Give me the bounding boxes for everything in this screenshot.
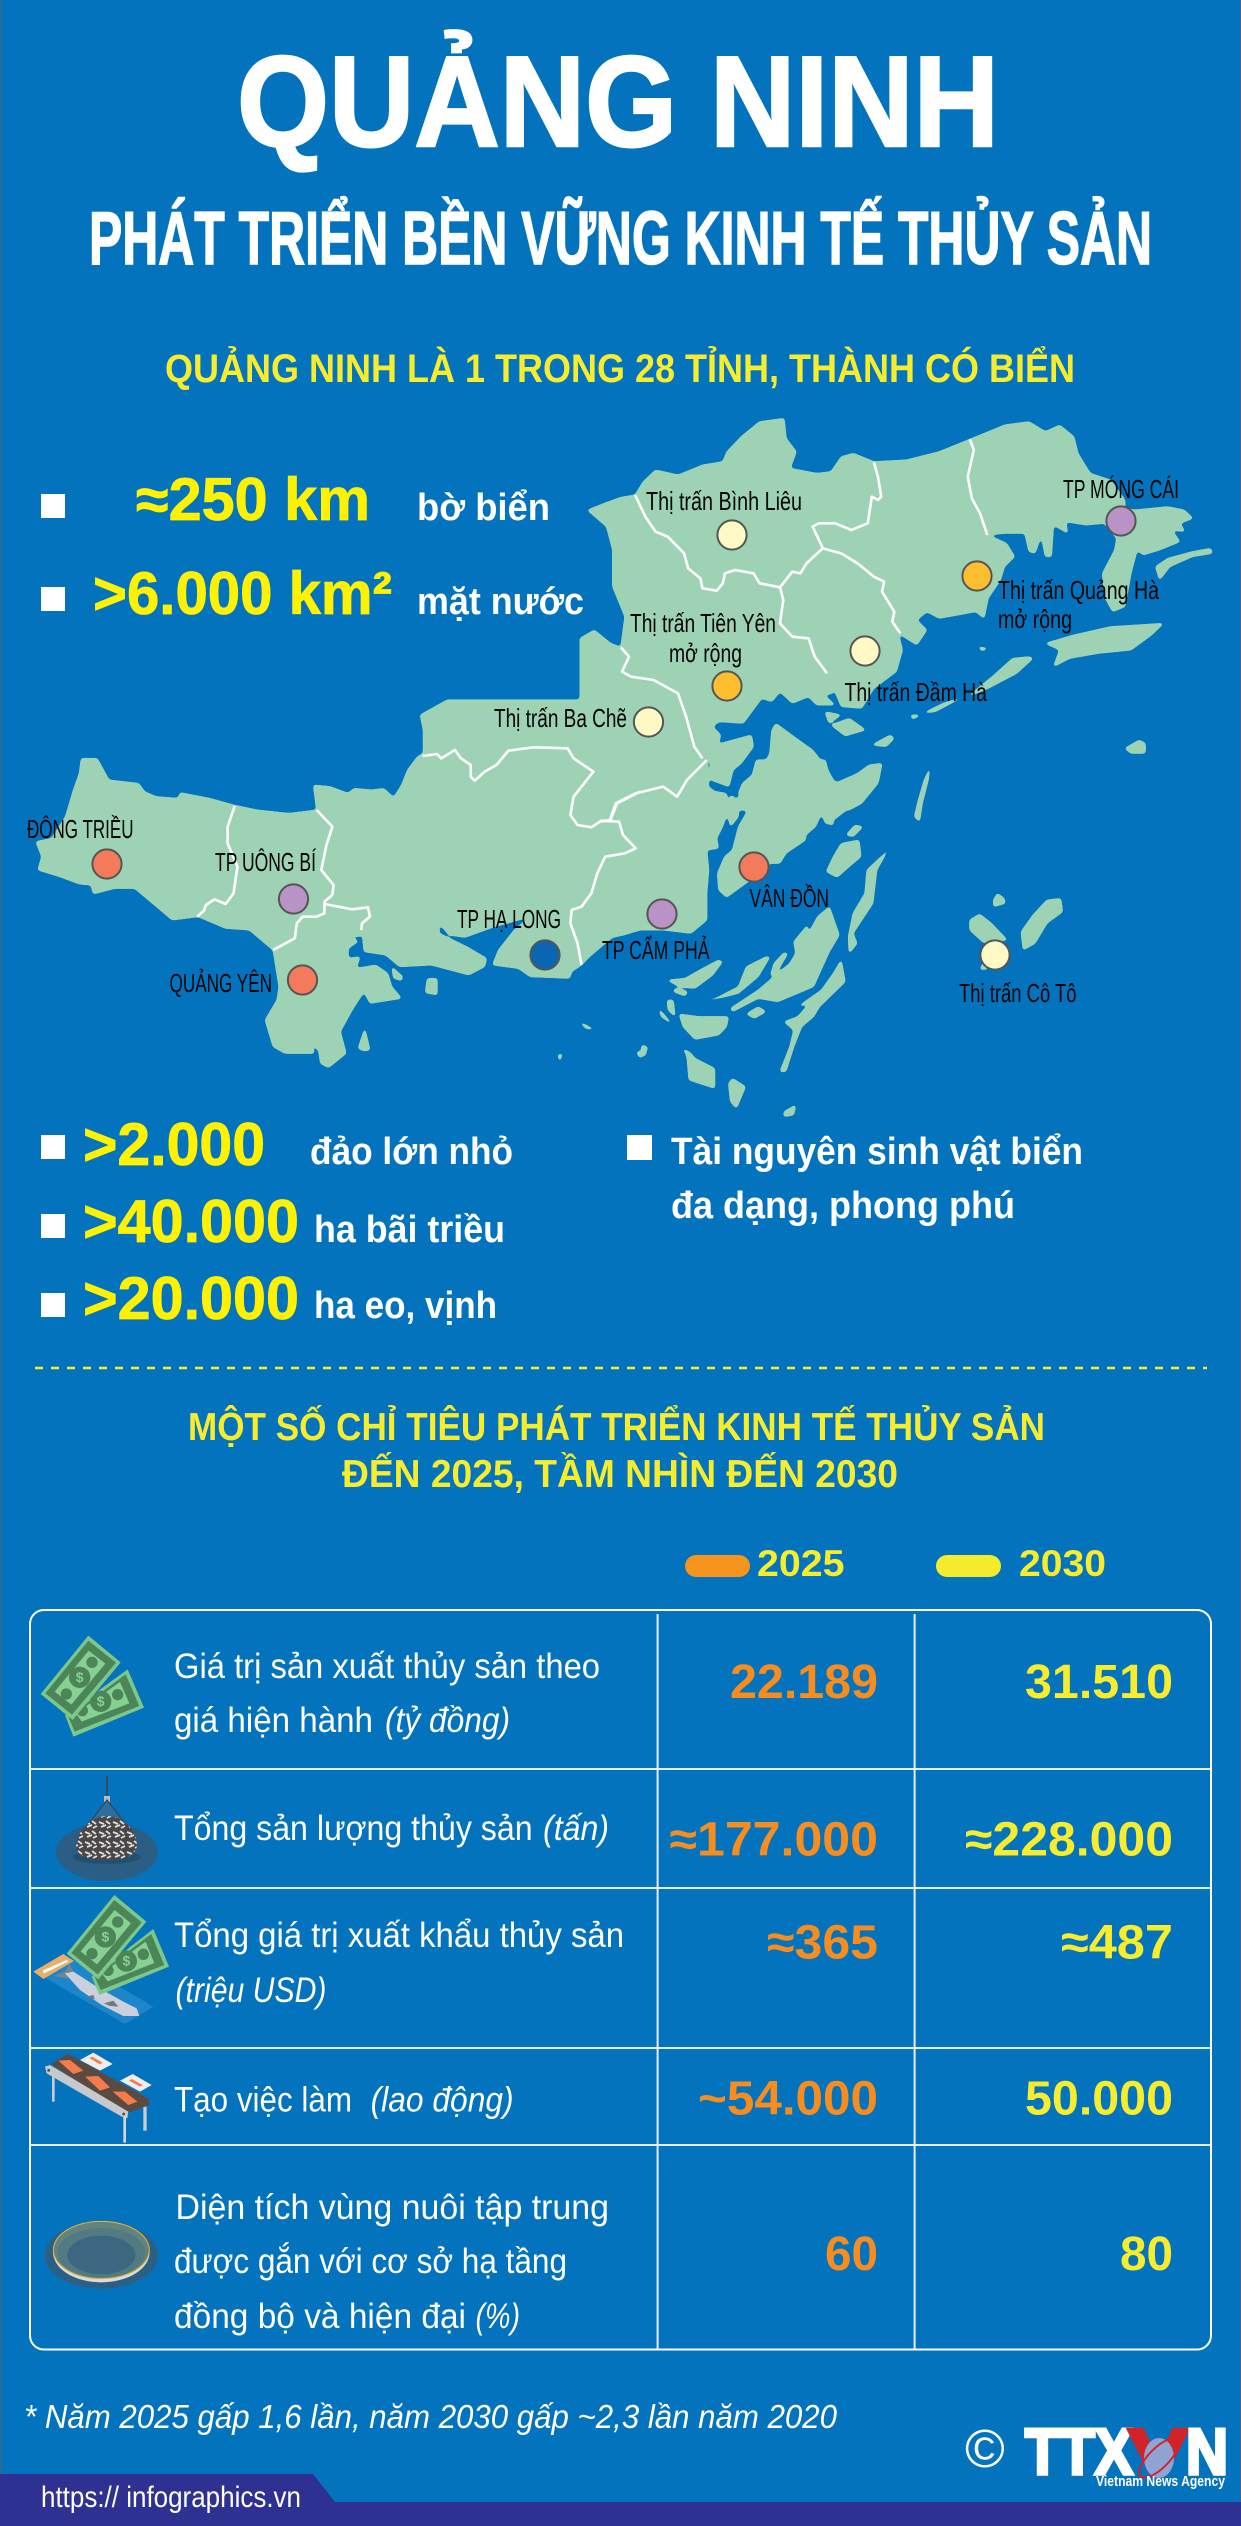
stat: water surface: >6.000 km² [93, 560, 392, 627]
value 2025: jobs: ~54.000 [698, 2073, 878, 2126]
value 2025: production value: 22.189 [730, 1656, 878, 1709]
map town labels: TP UÔNG BÍ [215, 847, 317, 877]
logo: TTXVN: V [1128, 2415, 1188, 2488]
row label: jobs [174, 2081, 514, 2120]
row label: export value: (triệu USD) [176, 1971, 326, 2010]
footer band [0, 2474, 1241, 2526]
row label: production value [174, 1647, 600, 1740]
section heading: targets: MỘT SỐ CHỈ TIÊU PHÁT TRIỂN KINH TẾ THỦY SẢN [188, 1404, 1045, 1449]
targets table [30, 1610, 1211, 2350]
value 2030: jobs: 50.000 [1025, 2073, 1173, 2126]
stat: bays [41, 1265, 497, 1332]
icon: money: $ [97, 1693, 105, 1709]
section heading: coastal province: QUẢNG NINH LÀ 1 TRONG 28 TỈNH, THÀNH CÓ BIỂN [165, 344, 1075, 391]
value 2030: farming area: 80 [1120, 2228, 1173, 2281]
map town markers [92, 506, 1136, 995]
map town labels: TP MÓNG CÁI [1063, 474, 1179, 504]
legend: 2025 [757, 1543, 844, 1584]
stat: coastline: ≈250 km [136, 466, 370, 533]
row label: total output: Tổng sản lượng thủy sản [174, 1809, 533, 1848]
map town labels: QUẢNG YÊN [170, 968, 272, 998]
map town labels: Thị trấn Cô Tô [959, 978, 1076, 1008]
row label: farming area: Diện tích vùng nuôi tập trung [176, 2188, 609, 2227]
stat: coastline [41, 466, 550, 533]
logo: TTXVN [1025, 2415, 1228, 2490]
stat: islands: đảo lớn nhỏ [310, 1131, 513, 1173]
row label: production value: giá hiện hành [174, 1701, 373, 1740]
map town labels: mở rộng [669, 638, 742, 668]
map town labels: Thị trấn Tiên Yên [630, 608, 776, 638]
row label: production value: Giá trị sản xuất thủy sản theo [174, 1647, 600, 1686]
stat: islands: >2.000 [83, 1111, 265, 1178]
icon: fish and money export: $ [101, 1929, 109, 1945]
stat: marine resources: đa dạng, phong phú [671, 1185, 1015, 1227]
icon: money [41, 1636, 144, 1737]
map town labels: Thị trấn Đầm Hà [844, 677, 987, 707]
icon: money: $ [76, 1669, 84, 1685]
map town labels: TP HẠ LONG [457, 904, 561, 934]
row label: jobs: (lao động) [371, 2081, 514, 2120]
map land masses [36, 418, 1213, 1153]
row label: farming area: đồng bộ và hiện đại [174, 2297, 466, 2336]
footnote: * Năm 2025 gấp 1,6 lần, năm 2030 gấp ~2,3 lần năm 2020 [24, 2398, 838, 2435]
map of Quang Ninh [27, 418, 1213, 1153]
stat: water surface: mặt nước [417, 581, 584, 623]
map town labels: Thị trấn Ba Chẽ [494, 703, 627, 733]
map town labels: VÂN ĐỒN [750, 883, 829, 913]
copyright symbol: © [965, 2419, 1005, 2479]
stat: marine resources: Tài nguyên sinh vật biển [671, 1131, 1083, 1173]
map town labels: Thị trấn Quảng Hà [998, 575, 1159, 605]
row label: export value [174, 1916, 624, 2010]
map town labels: mở rộng [998, 604, 1072, 634]
title: QUẢNG NINH [237, 29, 999, 174]
stat: coastline: bờ biển [417, 487, 550, 529]
website url: https:// infographics.vn [41, 2481, 301, 2514]
row label: total output: (tấn) [543, 1809, 609, 1848]
row label: jobs: Tạo việc làm [174, 2081, 352, 2120]
stat: tidal flats [41, 1188, 505, 1255]
row label: farming area: được gắn với cơ sở hạ tầng [174, 2242, 567, 2281]
value 2025: export value: ≈365 [767, 1917, 878, 1970]
stat: tidal flats: >40.000 [83, 1188, 299, 1255]
stat: islands [41, 1111, 513, 1178]
map town labels: TP CẨM PHẢ [602, 935, 710, 965]
value 2030: export value: ≈487 [1061, 1917, 1173, 1970]
map district borders [197, 439, 987, 965]
section heading: targets: ĐẾN 2025, TẦM NHÌN ĐẾN 2030 [342, 1452, 898, 1496]
value 2030: production value: 31.510 [1025, 1656, 1173, 1709]
value 2025: total output: ≈177.000 [670, 1814, 878, 1866]
section heading: targets [188, 1404, 1045, 1496]
logo: TTXVN: TTX [1025, 2415, 1133, 2488]
logo: TTXVN: N [1186, 2415, 1228, 2488]
value 2025: farming area: 60 [825, 2228, 878, 2281]
stat: marine resources [627, 1131, 1083, 1227]
stat: tidal flats: ha bãi triều [314, 1209, 505, 1251]
icon: conveyor [45, 2053, 152, 2143]
row label: farming area: (%) [476, 2297, 520, 2336]
map town labels: Thị trấn Bình Liêu [646, 486, 802, 516]
icon: fish pond [45, 2221, 158, 2289]
legend [685, 1543, 1106, 1584]
value 2030: total output: ≈228.000 [965, 1814, 1173, 1866]
icon: fish and money export [33, 1895, 169, 2024]
map town labels: ĐÔNG TRIỀU [27, 814, 134, 844]
legend: 2030 [1019, 1543, 1106, 1584]
row label: farming area [174, 2188, 609, 2336]
map town labels [27, 474, 1179, 1008]
row label: production value: (tỷ đồng) [385, 1701, 510, 1740]
stat: water surface [41, 560, 584, 627]
icon: fish net [56, 1776, 158, 1881]
stat: bays: ha eo, vịnh [314, 1285, 497, 1327]
row label: export value: Tổng giá trị xuất khẩu thủy sản [174, 1916, 624, 1955]
icon: fish and money export: $ [122, 1953, 130, 1969]
stat: bays: >20.000 [83, 1265, 299, 1332]
